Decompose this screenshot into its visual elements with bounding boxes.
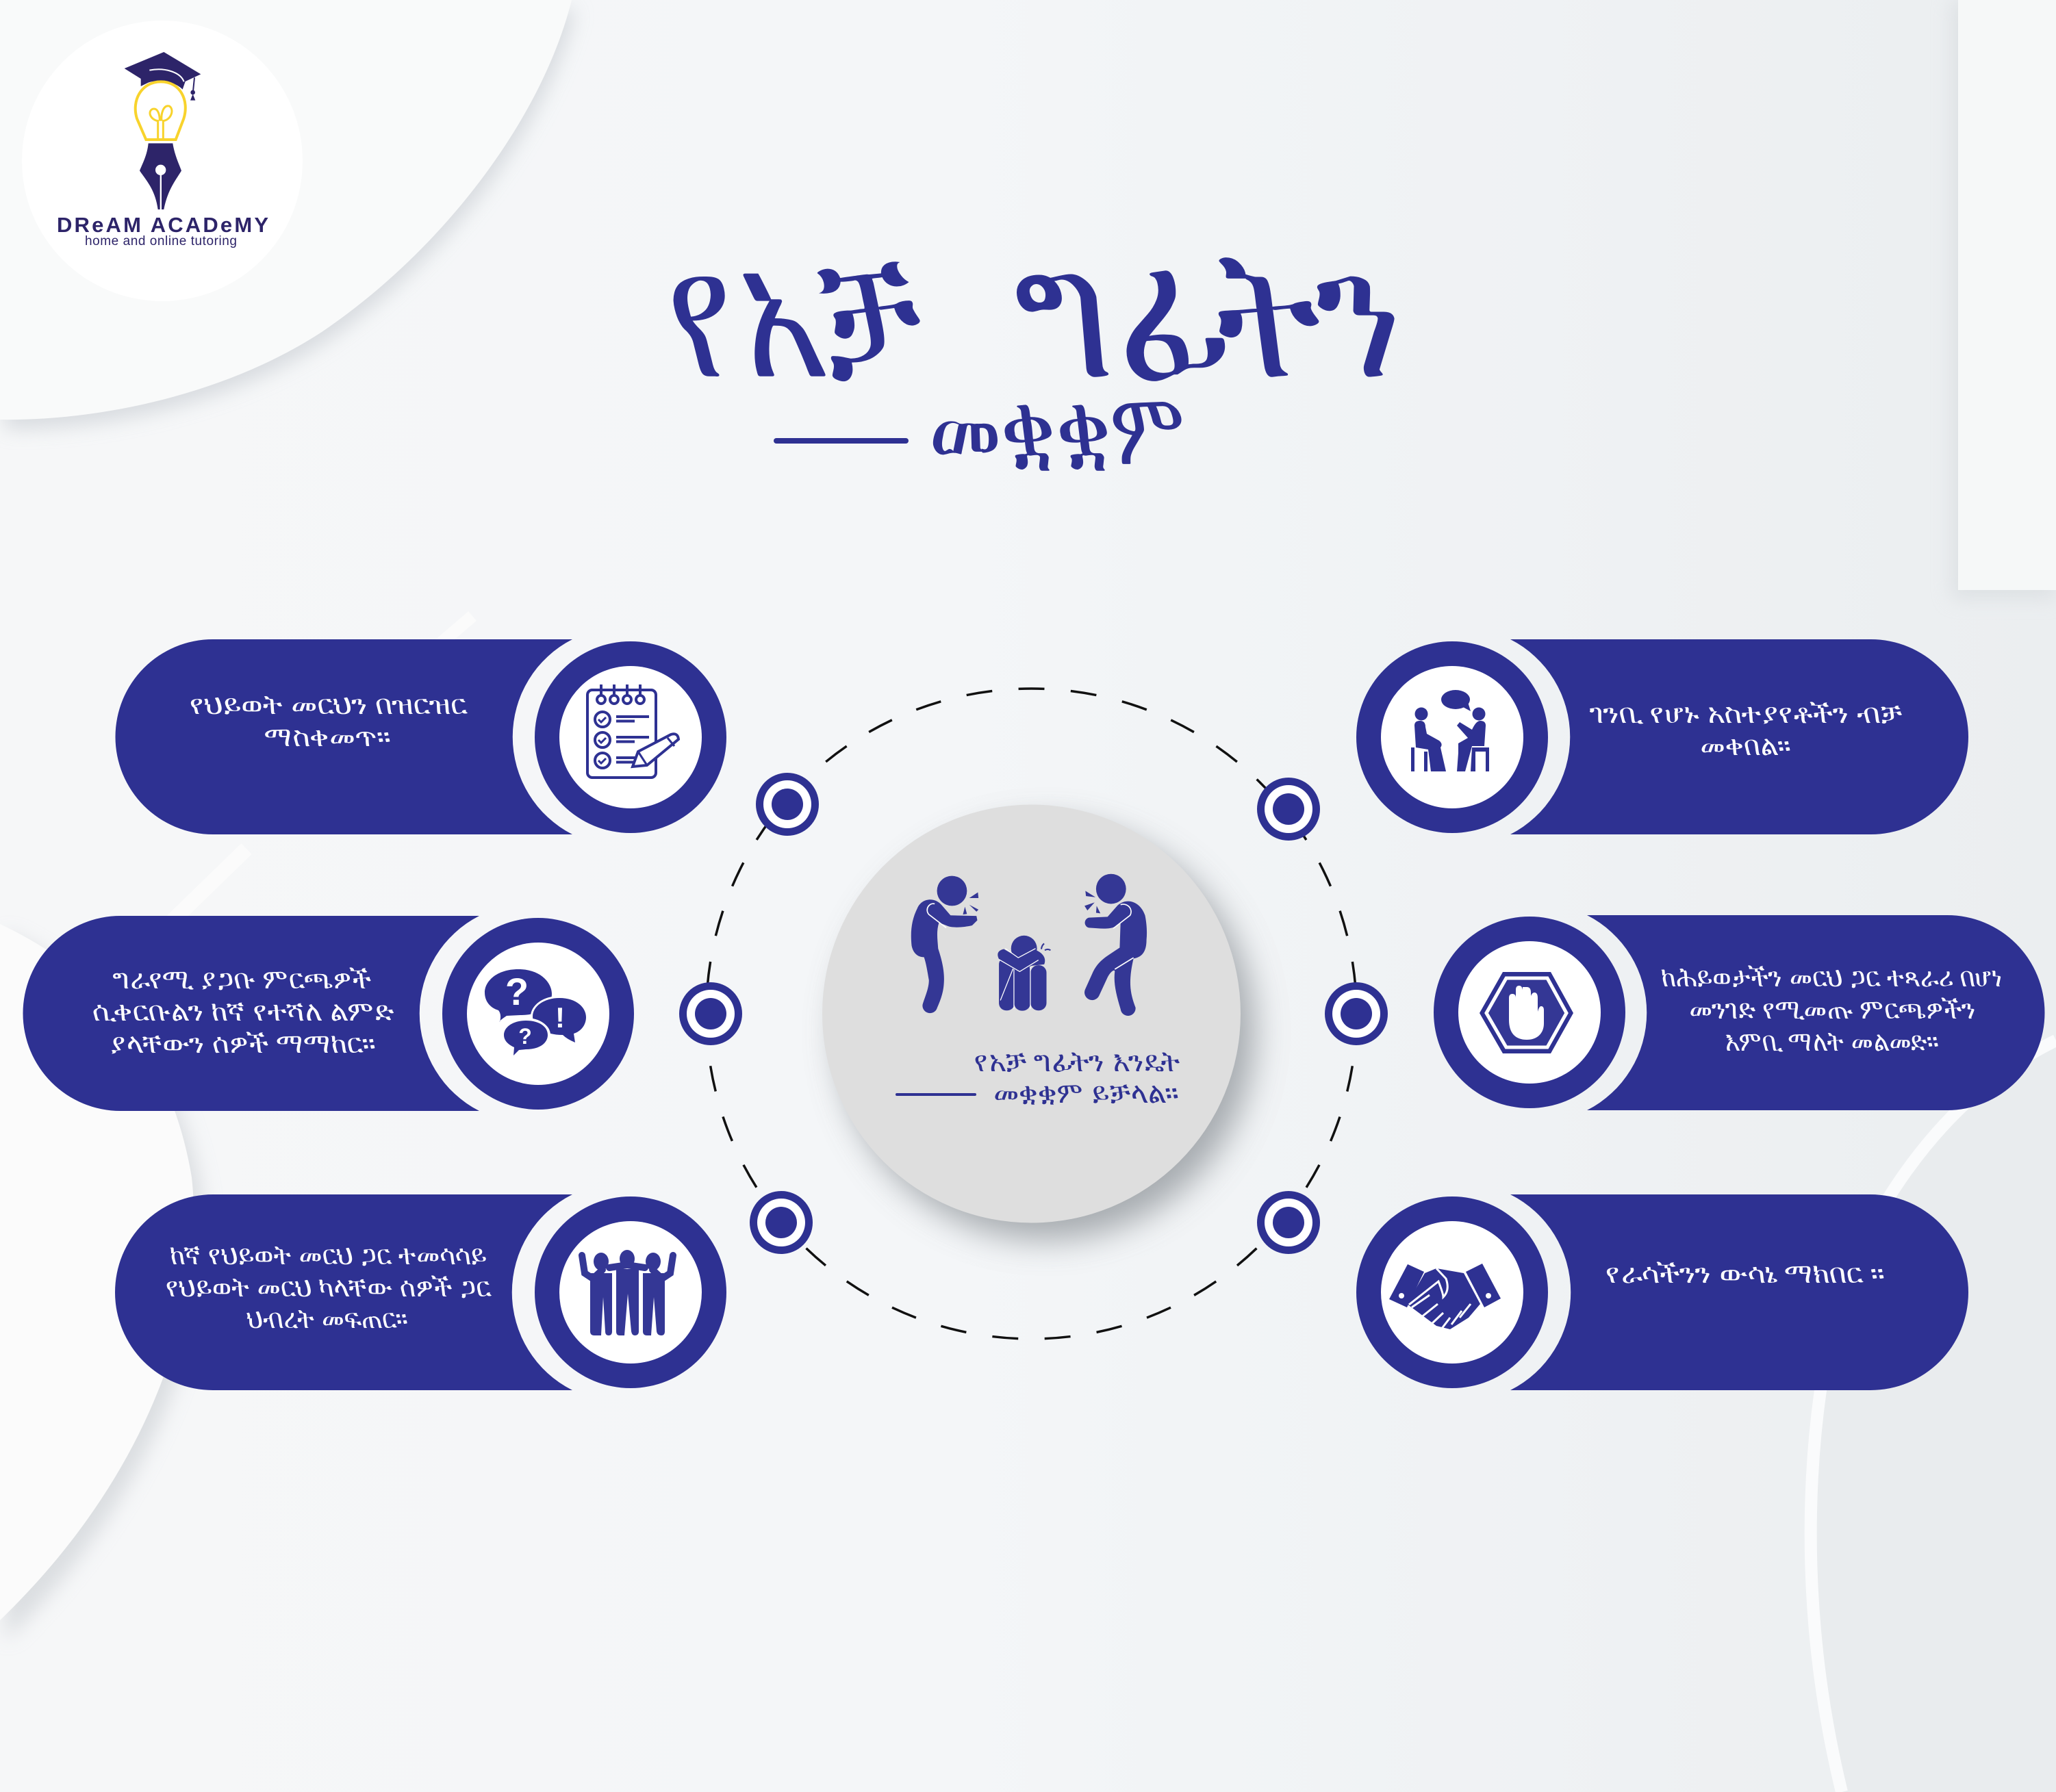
text: left card 3 (163, 1240, 494, 1334)
text: right card 2 (1658, 962, 2005, 1057)
text: left card 3: ህብረት መፍጠር። (244, 1304, 411, 1334)
panel: centre disc (822, 805, 1255, 1240)
panel: left card 1 (116, 639, 726, 834)
text: right card 2: መንገድ የሚመጡ ምርጫዎችን (1686, 995, 1979, 1025)
title line one, first word: የአቻ (644, 213, 945, 415)
text: left card 3: የህይወት መርህ ካላቸው ሰዎች ጋር (163, 1272, 494, 1303)
text: left card 1: የህይወት መርህን በዝርዝር (187, 690, 470, 720)
icon: three people arms raised (582, 1250, 673, 1335)
text: left card 2: ያላቸውን ሰዎች ማማከር። (106, 1029, 379, 1059)
text: right card 1: መቀበል። (1697, 731, 1794, 761)
panel: right card 3 (1356, 1194, 1968, 1390)
text: left card 1 (187, 690, 470, 752)
node bottom left (750, 1191, 813, 1254)
node middle left (679, 982, 742, 1045)
icon: two people pointing at a crouching person (911, 874, 1147, 1016)
icon: checklist and pencil (587, 684, 678, 778)
text: right card 3: የራሳችንን ውሳኔ ማክበር ። (1603, 1259, 1888, 1289)
panel: right card 1 (1356, 639, 1968, 834)
icon: stop hand (1480, 972, 1573, 1053)
exclamation mark: ! (555, 1001, 565, 1034)
text: right card 2: እምቢ ማለት መልመድ። (1721, 1027, 1942, 1057)
dashed ring (707, 689, 1357, 1339)
logo name: DReAM ACADeMY (57, 213, 268, 237)
title rule (774, 438, 909, 444)
caption rule (896, 1093, 976, 1096)
text: right card 1: ገንቢ የሆኑ አስተያየቶችን ብቻ (1587, 699, 1905, 729)
logo tagline: home and online tutoring (85, 234, 237, 248)
text: left card 2: ሲቀርቡልን ከኛ የተሻለ ልምድ (89, 997, 397, 1027)
text: left card 2: ግራየሚ ያጋቡ ምርጫዎች (110, 964, 375, 995)
text: left card 2 (89, 964, 397, 1059)
title line two: መቋቋም (911, 372, 1202, 486)
text: left card 1: ማስቀመጥ። (262, 722, 394, 752)
icon: speech bubbles (485, 969, 588, 1055)
node top right (1257, 778, 1320, 841)
ring nodes (679, 773, 1388, 1254)
text: right card 2: ከሕይወታችን መርህ ጋር ተጻራሪ በሆነ (1658, 962, 2005, 993)
caption line two: መቋቋም ይቻላል። (989, 1077, 1182, 1109)
panel: right card 2 (1434, 915, 2044, 1110)
logo (22, 21, 303, 301)
logo mark: cap, bulb and pen nib (125, 52, 201, 210)
question mark large: ? (505, 970, 529, 1013)
node top left (756, 773, 819, 836)
panel: left card 2 (23, 916, 634, 1111)
icon: two people talking (1411, 690, 1489, 771)
node middle right (1325, 982, 1388, 1045)
caption line one: የአቻ ግፊትን እንዴት (971, 1045, 1183, 1077)
question mark small: ? (518, 1024, 532, 1049)
icon: handshake (1389, 1264, 1501, 1329)
title (644, 213, 1425, 486)
panel: left card 3 (115, 1194, 726, 1390)
centre caption (896, 1045, 1183, 1109)
title line one, second word: ግፊትን (993, 213, 1425, 415)
node bottom right (1257, 1191, 1320, 1254)
text: left card 3: ከኛ የህይወት መርህ ጋር ተመሳሳይ (167, 1240, 490, 1270)
text: right card 1 (1587, 699, 1905, 761)
